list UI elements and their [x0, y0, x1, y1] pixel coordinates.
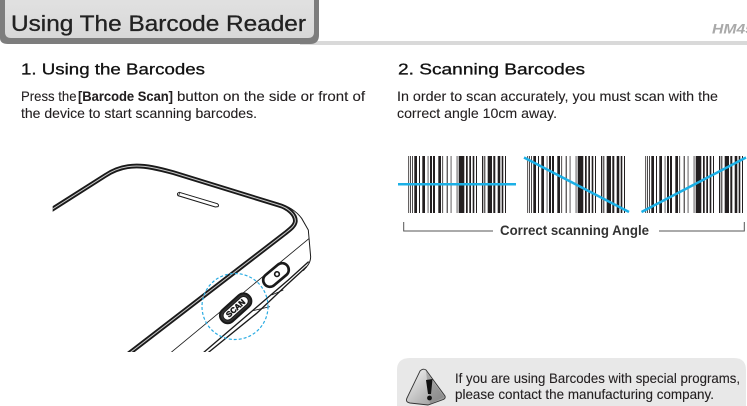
text block: press button instructions: [Barcode Scan] [78, 88, 173, 104]
barcode: right angled scan [642, 156, 746, 213]
seam line [170, 238, 309, 353]
icon: warning triangle [406, 369, 445, 405]
title: Using The Barcode Reader [11, 11, 306, 36]
barcode: straight scan [398, 156, 516, 213]
notice text [455, 370, 740, 402]
speaker [177, 192, 219, 207]
text block: press button instructions: button on the side or front of [177, 88, 365, 104]
bracket: correct scanning angle [404, 222, 744, 238]
notice text: please contact the manufacturing company. [455, 386, 714, 402]
scan button: SCAN [224, 297, 247, 319]
text block: press button instructions [21, 88, 365, 121]
text block: press button instructions: the device to start scanning barcodes. [21, 105, 257, 121]
text block: press button instructions: Press the [21, 88, 77, 104]
heading: scanning barcodes: 2. Scanning Barcodes [398, 62, 585, 78]
model label: HM45 [712, 22, 747, 36]
heading: using the barcodes: 1. Using the Barcodes [21, 62, 205, 78]
device illustration [50, 166, 311, 354]
dashed highlight circle [202, 274, 268, 340]
bracket label: Correct scanning Angle [500, 223, 649, 238]
header tab [0, 0, 319, 44]
device bezel band [50, 166, 295, 354]
device outer edge [278, 203, 311, 271]
scan button [218, 292, 252, 324]
text block: scanning instructions: In order to scan accurately, you must scan with the [397, 88, 718, 104]
lower side edges [203, 262, 309, 353]
header rule [300, 41, 747, 45]
text block: scanning instructions: correct angle 10cm away. [397, 105, 557, 121]
text block: scanning instructions [397, 88, 718, 121]
power button [262, 262, 290, 288]
barcode: left angled scan [524, 156, 629, 213]
callout: notice [397, 358, 746, 406]
